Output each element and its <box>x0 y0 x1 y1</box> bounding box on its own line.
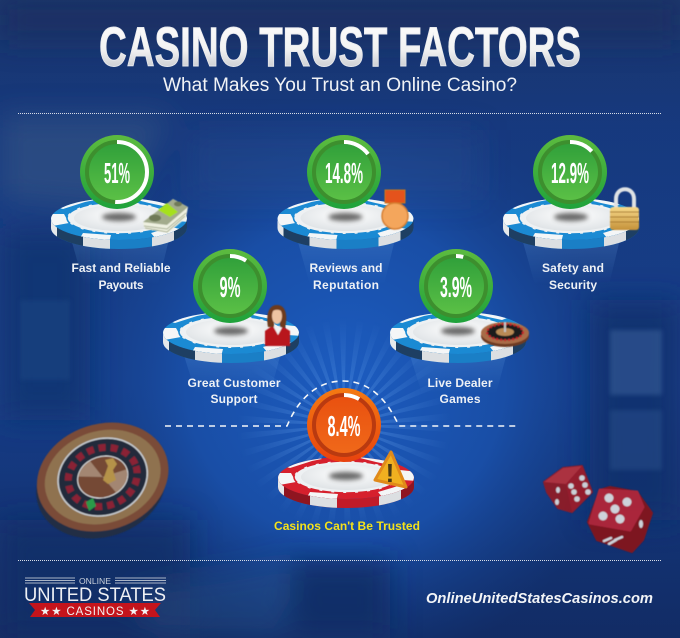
panel: casinos can't be trusted <box>274 388 420 533</box>
label <box>72 261 171 292</box>
dashed arch divider <box>165 381 518 426</box>
panel: fast and reliable payouts <box>47 135 191 292</box>
icon: customer support agent <box>265 305 290 346</box>
percentage badge 51% <box>80 135 154 209</box>
large die <box>588 487 652 552</box>
panel: safety and security <box>499 135 643 292</box>
icon: medal <box>382 190 408 229</box>
icon: money stack <box>143 199 188 233</box>
logo: online united states casinos <box>24 577 166 618</box>
percentage badge 8.4% <box>307 388 381 462</box>
icon: warning triangle: ! <box>386 458 394 488</box>
percentage badge 51%: 51% <box>104 158 130 190</box>
illustration: large roulette wheel <box>20 406 185 555</box>
chip <box>274 193 418 254</box>
logo: online united states casinos: ★★ CASINOS ★★ <box>40 606 150 618</box>
chip <box>47 193 191 254</box>
label: Games <box>440 392 481 406</box>
label: Fast and Reliable <box>72 261 171 275</box>
illustration: red dice <box>544 466 652 552</box>
icon: small roulette wheel <box>481 322 529 347</box>
percentage badge 9%: 9% <box>220 272 241 304</box>
label <box>428 376 493 406</box>
logo: online united states casinos: UNITED STATES <box>24 585 166 606</box>
label: Safety and <box>542 261 604 275</box>
panel: reviews and reputation <box>274 135 418 292</box>
logo: online united states casinos: ONLINE <box>79 577 111 586</box>
panel: live dealer games <box>386 249 530 406</box>
chip <box>499 193 643 254</box>
label: Security <box>549 278 597 292</box>
label: Great Customer <box>188 376 281 390</box>
subtitle: What Makes You Trust an Online Casino? <box>163 75 517 96</box>
label: Reputation <box>313 278 379 292</box>
label <box>188 376 281 406</box>
percentage badge 3.9% <box>419 249 493 323</box>
percentage badge 14.8% <box>307 135 381 209</box>
label: Live Dealer <box>428 376 493 390</box>
label <box>542 261 604 292</box>
percentage badge 14.8%: 14.8% <box>325 158 363 190</box>
website url: OnlineUnitedStatesCasinos.com <box>426 590 653 607</box>
percentage badge 3.9%: 3.9% <box>440 272 472 304</box>
icon: warning triangle <box>375 452 406 488</box>
percentage badge 9% <box>193 249 267 323</box>
panel: great customer support <box>159 249 303 406</box>
percentage badge 8.4%: 8.4% <box>328 411 361 443</box>
label <box>310 261 382 292</box>
percentage badge 12.9%: 12.9% <box>551 158 589 190</box>
chip <box>159 307 303 368</box>
label: Reviews and <box>310 261 382 275</box>
label: Casinos Can't Be Trusted <box>274 519 420 533</box>
label: Payouts <box>98 278 144 292</box>
label: Support <box>210 392 258 406</box>
chip <box>386 307 530 368</box>
icon: padlock <box>610 189 639 230</box>
small die <box>544 466 592 512</box>
chip <box>274 452 418 513</box>
light rays behind warning statistic <box>284 365 404 485</box>
percentage badge 12.9% <box>533 135 607 209</box>
